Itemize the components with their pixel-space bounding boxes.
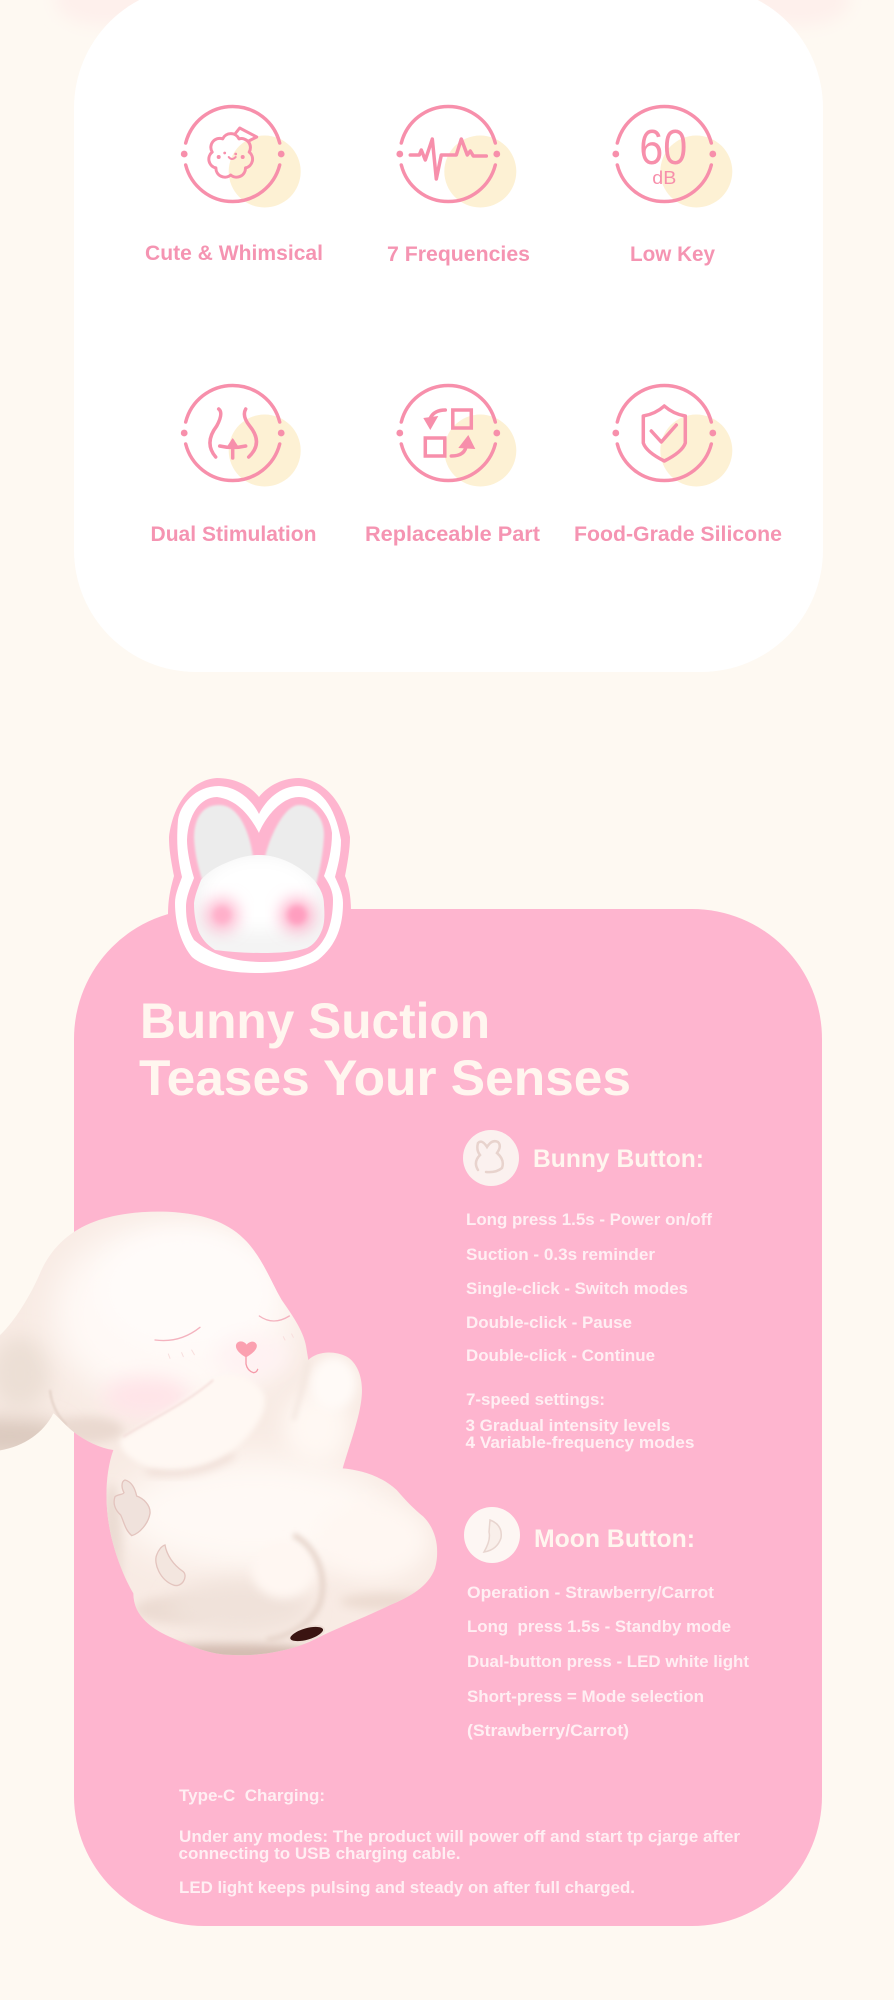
section: type-c charging notes: LED light keeps pulsing and steady on after full charged. bbox=[179, 1878, 635, 1897]
bunny eyes bbox=[155, 1316, 293, 1358]
instructions list: Operation - Strawberry/Carrot bbox=[467, 1583, 714, 1602]
icon: cloud with bow bbox=[181, 106, 301, 208]
instructions list bbox=[467, 1583, 749, 1740]
section: moon button bbox=[464, 1507, 749, 1740]
icon: bunny head badge bbox=[168, 778, 351, 973]
instructions list: Double-click - Continue bbox=[466, 1346, 655, 1365]
heading: Moon Button: bbox=[534, 1525, 695, 1553]
instructions list: Suction - 0.3s reminder bbox=[466, 1245, 655, 1264]
title: Teases Your Senses bbox=[139, 1050, 631, 1106]
instructions list bbox=[466, 1210, 712, 1452]
charging port bbox=[288, 1623, 326, 1645]
icon: 60 dB bbox=[612, 106, 732, 208]
section: type-c charging notes bbox=[178, 1786, 740, 1897]
instructions list: 4 Variable-frequency modes bbox=[466, 1433, 694, 1452]
label: 7 Frequencies bbox=[387, 243, 530, 266]
faint pink glow top right bbox=[750, 0, 850, 26]
device bunny button bbox=[114, 1480, 150, 1536]
instructions list: Dual-button press - LED white light bbox=[467, 1652, 749, 1671]
feature: dual stimulation bbox=[150, 385, 316, 546]
instructions list: 7-speed settings: bbox=[466, 1390, 605, 1409]
heading: Bunny Button: bbox=[533, 1145, 704, 1173]
instructions list: (Strawberry/Carrot) bbox=[467, 1721, 629, 1740]
icon: bunny button bbox=[463, 1130, 519, 1186]
title: Bunny Suction bbox=[140, 993, 490, 1049]
faint pink glow top left bbox=[55, 0, 155, 26]
instructions list: Long press 1.5s - Standby mode bbox=[467, 1617, 731, 1636]
device moon button bbox=[156, 1545, 185, 1586]
section: bunny button bbox=[463, 1130, 712, 1452]
bunny mouth bbox=[246, 1357, 258, 1373]
instructions list: 3 Gradual intensity levels bbox=[466, 1416, 670, 1435]
section: type-c charging notes: Type-C Charging: bbox=[179, 1786, 325, 1805]
title bbox=[139, 993, 631, 1106]
label: Low Key bbox=[630, 243, 715, 266]
instructions list: Single-click - Switch modes bbox=[466, 1279, 688, 1298]
icon: 60 dB: 60 bbox=[639, 121, 687, 175]
icon: shield with check bbox=[612, 385, 732, 486]
instructions list: Double-click - Pause bbox=[466, 1313, 632, 1332]
section: type-c charging notes: Under any modes: The product will power off and start tp cjarge after bbox=[179, 1827, 740, 1846]
instructions list: Short-press = Mode selection bbox=[467, 1687, 704, 1706]
feature: cute and whimsical bbox=[145, 106, 323, 265]
icon: swap squares bbox=[396, 385, 516, 486]
label: Dual Stimulation bbox=[150, 523, 316, 546]
section: type-c charging notes: connecting to USB charging cable. bbox=[178, 1844, 460, 1863]
label: Cute & Whimsical bbox=[145, 242, 323, 265]
icon: hips with arrow bbox=[181, 385, 301, 486]
feature: replaceable part bbox=[365, 385, 540, 546]
instructions list: Long press 1.5s - Power on/off bbox=[466, 1210, 712, 1229]
icon: 60 dB: dB bbox=[652, 168, 676, 188]
feature: 7 frequencies bbox=[387, 106, 530, 266]
feature: food-grade silicone bbox=[574, 385, 782, 546]
bunny nose bbox=[236, 1341, 257, 1357]
icon: heartbeat bbox=[396, 106, 516, 208]
label: Replaceable Part bbox=[365, 523, 540, 546]
product: bunny device bbox=[0, 1200, 443, 1667]
label: Food-Grade Silicone bbox=[574, 523, 782, 546]
panel: features bbox=[74, 0, 823, 672]
panel: bunny suction bbox=[74, 909, 822, 1926]
panel background bbox=[74, 0, 823, 672]
icon: moon button bbox=[464, 1507, 520, 1563]
feature: low key bbox=[612, 106, 732, 266]
